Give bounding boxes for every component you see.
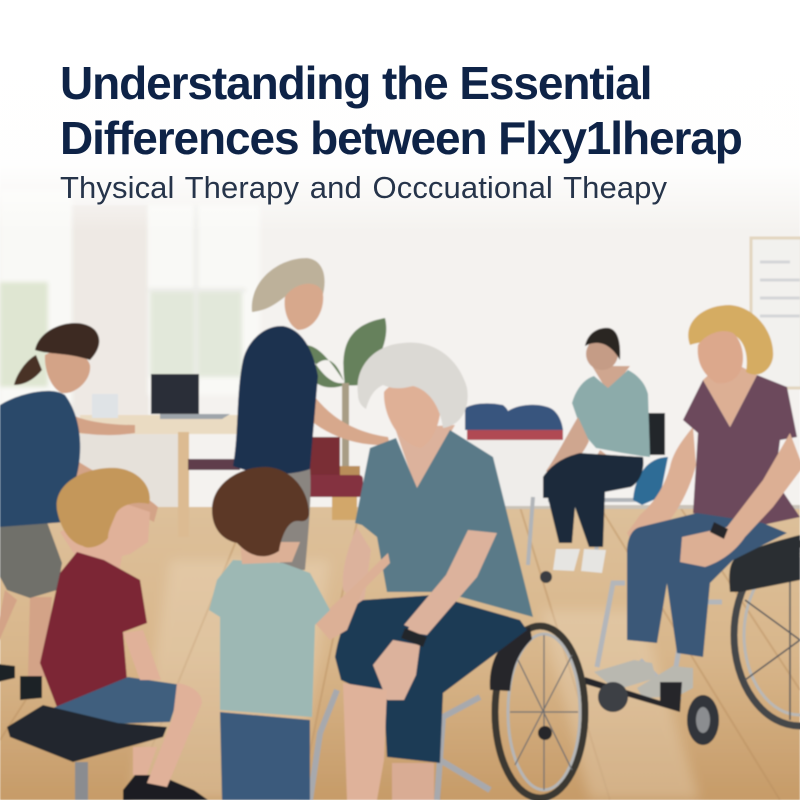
plant	[305, 318, 397, 478]
woman in maroon shirt wheelchair	[585, 305, 800, 745]
therapy bench	[188, 403, 563, 520]
title: Understanding the Essential	[60, 57, 651, 109]
standing therapist	[233, 258, 390, 570]
windows	[0, 190, 260, 405]
title: Differences between Flxy1lherap	[60, 112, 742, 164]
elderly woman in wheelchair	[310, 342, 585, 800]
seated woman in background wheelchair	[528, 328, 668, 583]
boy in red shirt on stool	[7, 468, 208, 800]
desk with laptop	[80, 374, 240, 537]
child at left, standing	[0, 323, 158, 700]
whiteboard	[751, 238, 800, 388]
title	[60, 57, 742, 164]
white fade behind title	[0, 0, 800, 232]
toddler in mint shirt	[209, 467, 390, 800]
subtitle: Thysical Therapy and Occcuational Theapy	[60, 170, 667, 205]
